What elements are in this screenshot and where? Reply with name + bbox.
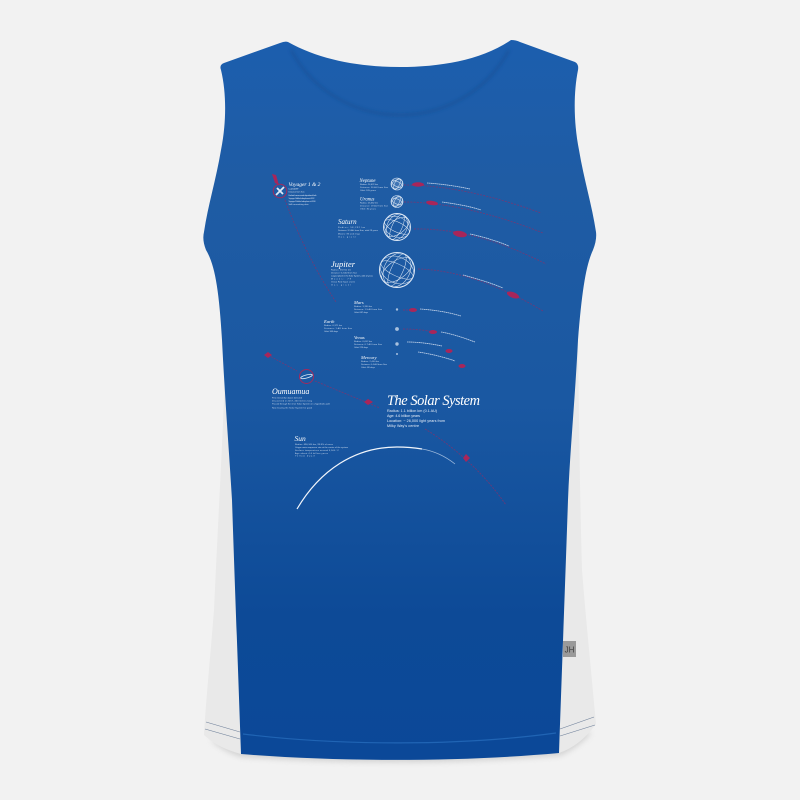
sun text — [294, 434, 348, 458]
mars text: Orbit: 687 days — [354, 311, 369, 314]
voyager trajectory — [285, 200, 336, 302]
orbit: mars — [403, 308, 461, 316]
jupiter text: Distance: 5.2 AU from Sun — [331, 272, 358, 274]
planet: uranus — [390, 195, 404, 208]
orbit: venus — [407, 342, 452, 353]
orbit: saturn — [414, 229, 546, 264]
mercury text — [360, 355, 388, 369]
oumuamua trajectory — [264, 352, 380, 408]
oumuamua text: Discovered in 2017, 400 metres long — [272, 400, 313, 402]
mercury text: Orbit: 88 days — [361, 366, 376, 369]
mars text — [353, 300, 383, 314]
sun text: Surface temperature around 5,500 °C — [295, 449, 339, 452]
uranus text: Uranus — [360, 198, 375, 202]
jupiter text: Great Red Spot storm — [331, 280, 355, 284]
tank top garment — [203, 40, 596, 762]
orbit: earth — [403, 329, 475, 342]
sun surface arc — [297, 447, 455, 509]
planet: mars — [396, 308, 398, 311]
sun text: Radius: 696,340 km, 99.8% of mass — [295, 444, 334, 446]
uranus text — [360, 198, 389, 210]
jupiter text: Radius: 69,911 km — [331, 270, 351, 272]
mercury text: Distance: 0.4 AU from Sun — [361, 363, 388, 366]
blue body — [203, 40, 596, 760]
planet: mercury — [396, 353, 398, 355]
title stats: Milky Way's centre — [387, 424, 419, 428]
planet: neptune — [390, 178, 404, 190]
icon: voyager probe — [272, 174, 287, 198]
neptune text: Distance: 30 AU from Sun — [360, 186, 389, 189]
title stats: Age: 4.6 billion years — [387, 414, 420, 418]
hem seam — [243, 733, 556, 743]
neptune text — [358, 179, 389, 192]
earth text: Earth — [323, 319, 335, 324]
neptune text: Orbit: 165 years — [360, 189, 377, 192]
voyager text: Voyager 1 & 2 — [288, 182, 321, 188]
oumuamua text: First interstellar object detected — [272, 396, 303, 400]
oumuamua text: Now leaving the Solar System for good — [272, 406, 313, 410]
voyager text: Distance from Sun — [288, 190, 305, 194]
orbit: mercury — [418, 352, 466, 368]
sun text: Sun — [294, 434, 306, 443]
earth text — [323, 319, 353, 333]
voyager text: Voyager 1 left the heliosphere in 2012 — [288, 197, 315, 200]
title stats: Location: ~ 26,000 light years from — [387, 419, 445, 423]
orbit: jupiter — [418, 269, 543, 311]
earth text: Orbit: 365 days — [324, 330, 339, 333]
collar seam — [291, 50, 509, 115]
mercury text: Mercury — [360, 355, 378, 360]
side stitching — [205, 717, 595, 739]
voyager text: Farthest human-made objects from Earth — [288, 194, 317, 197]
saturn text: Radius: 58,232 km — [338, 227, 365, 229]
mars text: Mars — [353, 300, 364, 305]
saturn text: Gas giant — [338, 236, 356, 238]
comet orbit near sun — [425, 429, 506, 505]
title stats — [387, 409, 445, 428]
sun text: Age about 4.6 billion years — [295, 452, 329, 455]
brand label — [563, 641, 576, 657]
saturn text — [338, 218, 379, 238]
voyager text — [288, 182, 321, 206]
solar system graphic — [264, 174, 546, 509]
venus text: Venus — [354, 335, 365, 340]
sun text: G-type main-sequence star at the centre of the system — [295, 446, 348, 449]
neptune text: Radius: 24,622 km — [360, 184, 378, 186]
jupiter text: Moons: 79 — [331, 278, 352, 280]
jupiter text — [331, 259, 374, 286]
planet: venus — [395, 342, 399, 346]
planet: jupiter — [376, 249, 418, 291]
white side panels — [204, 340, 596, 754]
uranus text: Distance: 19 AU from Sun — [360, 204, 389, 208]
oumuamua text: Passed through the inner Solar System on a hyperbolic path — [272, 402, 331, 406]
earth text: Distance: 1 AU from Sun — [324, 327, 353, 330]
jupiter text: Jupiter — [331, 259, 356, 269]
title stats: Radius: 1.1 billion km (0.1 AU) — [387, 409, 437, 413]
uranus text: Radius: 25,362 km — [360, 202, 378, 204]
mars text: Radius: 3,390 km — [354, 306, 372, 308]
oumuamua text — [272, 387, 331, 410]
mercury text: Radius: 2,440 km — [361, 361, 379, 363]
saturn text: Saturn — [338, 218, 357, 226]
sun text: Yellow dwarf — [295, 454, 315, 458]
voyager text: Still transmitting data — [288, 203, 309, 206]
saturn text: Distance: 9.5 AU from Sun, orbit 29 years — [338, 229, 379, 232]
venus text — [354, 335, 383, 349]
saturn text: Moons: 83 and rings — [338, 232, 361, 236]
venus text: Distance: 0.7 AU from Sun — [354, 343, 383, 346]
icon: oumuamua — [300, 370, 314, 384]
jupiter text: Largest planet in the Solar System, orbit 12 years — [331, 274, 374, 278]
earth text: Radius: 6,371 km — [324, 325, 342, 327]
neptune text: Neptune — [358, 179, 376, 184]
voyager text: Voyager 2 left the heliosphere in 2018 — [288, 200, 316, 203]
planet: earth — [395, 327, 399, 331]
planet: saturn — [381, 211, 413, 243]
oumuamua text: Oumuamua — [272, 387, 309, 396]
venus text: Radius: 6,052 km — [354, 341, 372, 343]
voyager text: Launched 1977 — [288, 188, 299, 190]
mars text: Distance: 1.5 AU from Sun — [354, 308, 383, 311]
title: The Solar System — [387, 393, 480, 409]
venus text: Orbit: 225 days — [354, 346, 369, 349]
brand label: JH — [565, 646, 575, 654]
uranus text: Orbit: 84 years — [360, 208, 377, 210]
orbit: neptune — [404, 182, 541, 213]
jupiter text: Gas giant — [331, 284, 351, 286]
orbit: uranus — [404, 200, 543, 233]
